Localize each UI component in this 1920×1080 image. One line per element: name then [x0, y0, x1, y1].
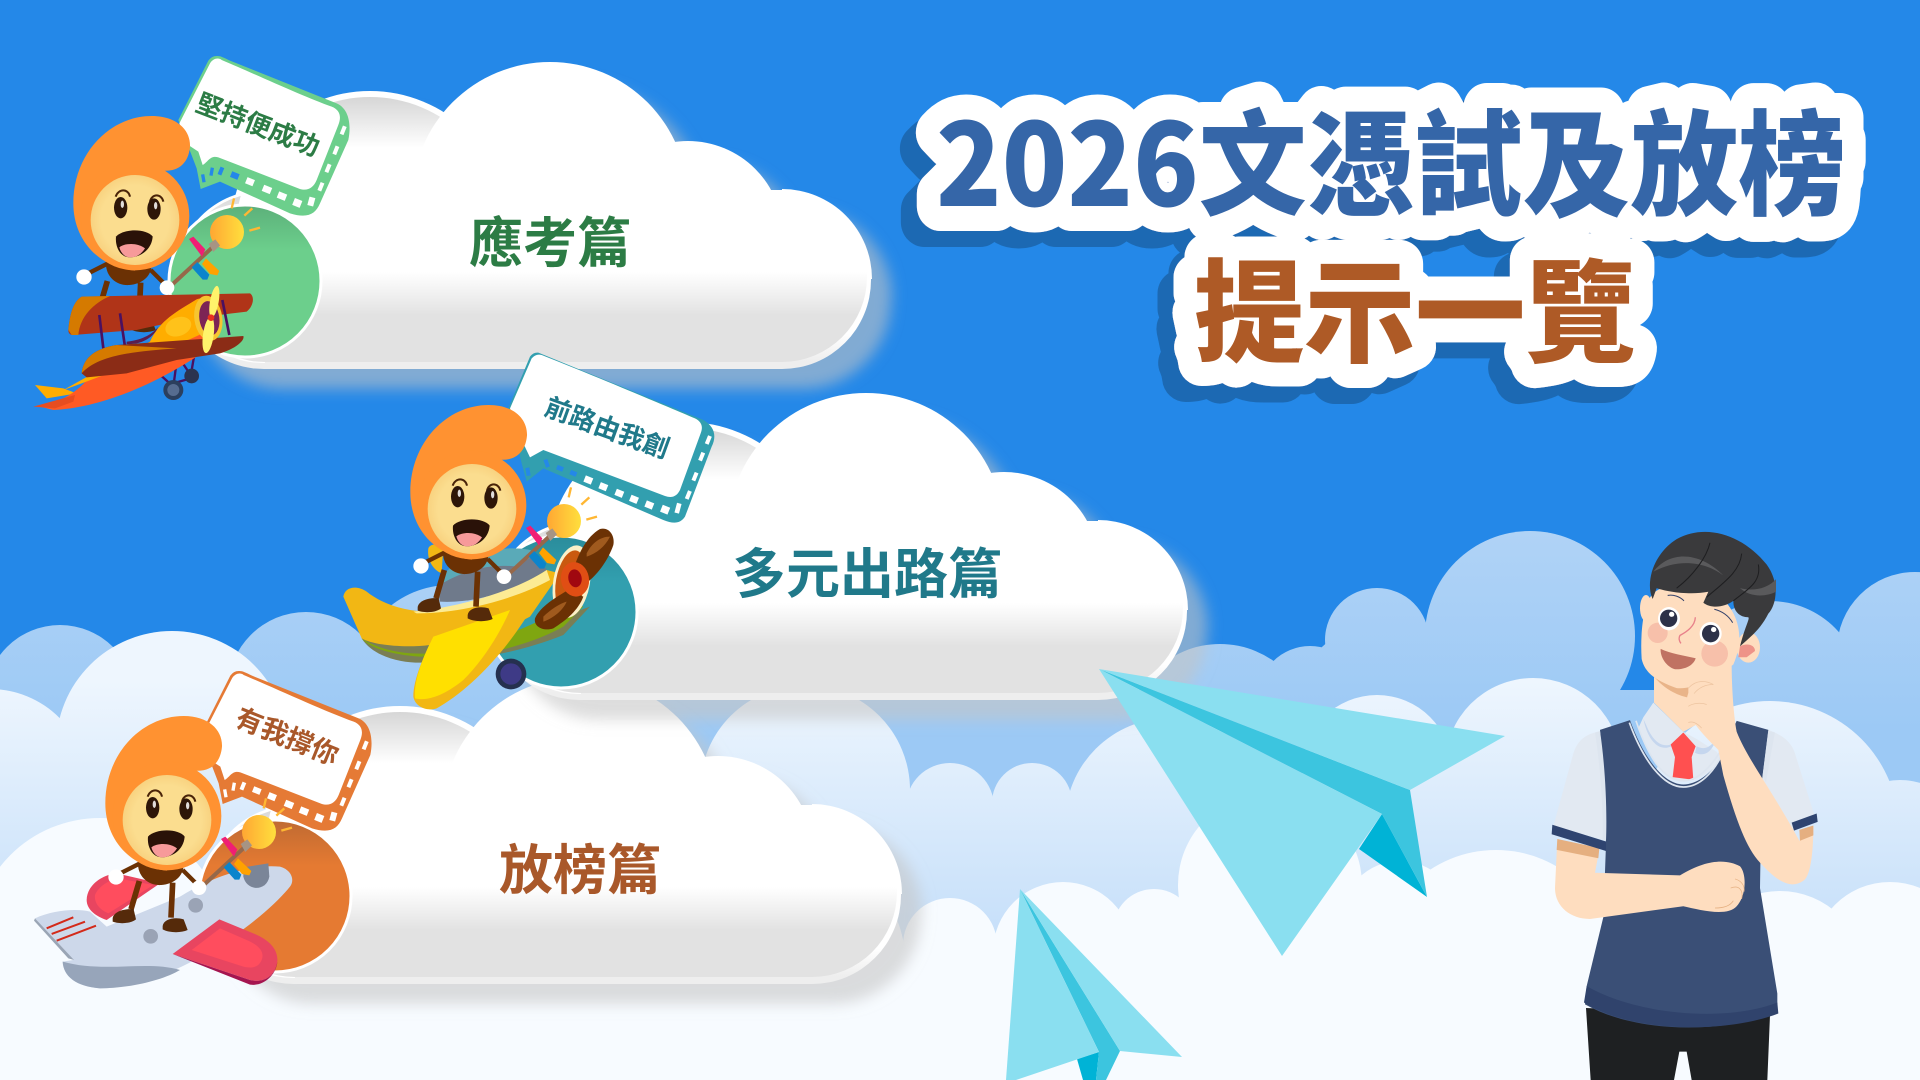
front cloud layer — [0, 793, 1920, 1080]
icon: yellow propeller plane — [343, 529, 614, 709]
back cloud layer — [0, 531, 1920, 1080]
speech bubble: 前路由我創 — [508, 353, 714, 523]
green badge circle — [169, 205, 321, 357]
title line 1: 2026文憑試及放榜 — [936, 74, 1846, 239]
heading: 多元出路篇: 多元出路篇 — [732, 530, 1002, 609]
speech bubble: 前路由我創: 前路由我創 — [540, 387, 675, 466]
icon: grey jet plane — [34, 863, 292, 988]
teal badge circle — [485, 536, 637, 688]
student character thinking — [1552, 532, 1818, 1080]
speech bubble: 有我撐你 — [200, 671, 372, 831]
heading: 放榜篇: 放榜篇 — [499, 826, 661, 905]
cloud card 2 — [491, 393, 1188, 700]
panel: 放榜篇 — [34, 671, 902, 988]
icon: large paper plane — [1099, 669, 1505, 956]
heading: 應考篇: 應考篇 — [469, 199, 631, 278]
mascot character — [410, 405, 597, 621]
icon: red biplane — [33, 285, 253, 410]
panel: 應考篇 — [33, 56, 872, 410]
speech bubble: 堅持便成功: 堅持便成功 — [191, 83, 326, 164]
mascot character — [105, 716, 292, 932]
cloud card 1 — [175, 62, 872, 369]
icon: small paper plane — [1006, 889, 1182, 1080]
panel: 多元出路篇 — [343, 353, 1188, 709]
orange badge circle — [199, 820, 351, 972]
middle cloud layer — [0, 631, 1920, 1080]
title line 2: 提示一覽 — [1194, 224, 1636, 386]
speech bubble: 堅持便成功 — [178, 56, 350, 216]
speech bubble: 有我撐你: 有我撐你 — [231, 696, 345, 773]
cloud card 3 — [205, 677, 902, 984]
mascot character — [73, 116, 260, 332]
